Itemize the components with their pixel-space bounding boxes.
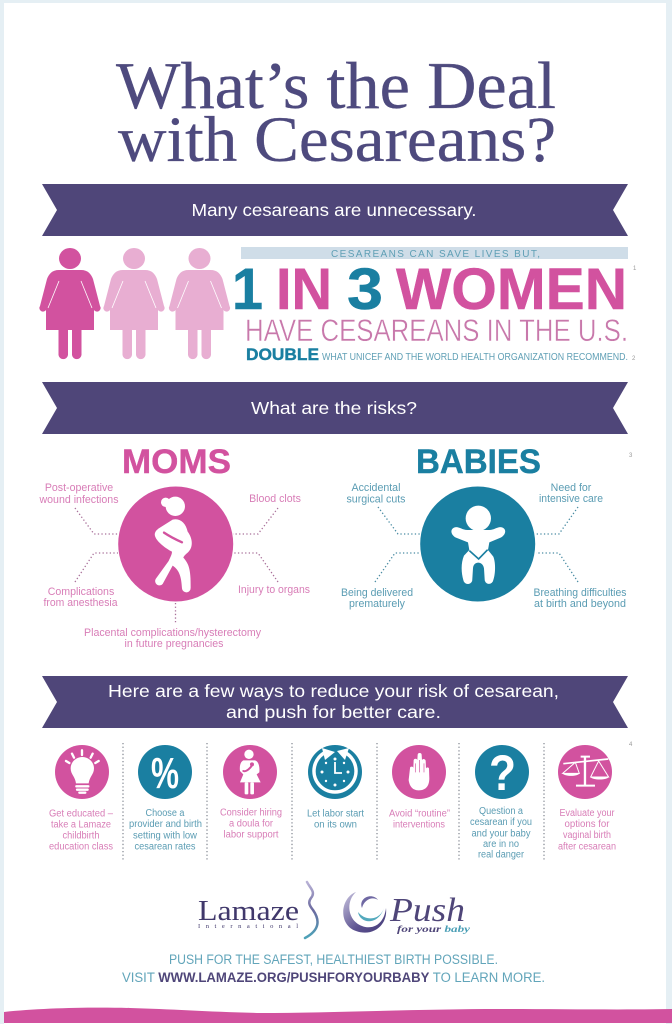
labels: moms bbox=[38, 482, 310, 650]
text: take a Lamaze bbox=[51, 820, 111, 830]
icon: question mark: ? bbox=[489, 745, 516, 801]
tip 5: avoid routine interventions bbox=[389, 745, 450, 830]
text bbox=[389, 808, 450, 830]
icon: hand bbox=[409, 753, 429, 790]
panel: babies risks: 3 bbox=[629, 453, 633, 459]
footer band bbox=[4, 1008, 672, 1023]
icon: doula bbox=[240, 750, 261, 794]
logo: Push for your baby: for your baby bbox=[397, 925, 471, 935]
labels: moms: from anesthesia bbox=[44, 597, 118, 609]
labels: moms: Injury to organs bbox=[238, 584, 310, 596]
statistic block: CESAREANS CAN SAVE LIVES BUT, bbox=[331, 249, 540, 260]
logo: Lamaze International: Lamaze bbox=[198, 895, 299, 927]
icon: clock with arrow bbox=[314, 748, 356, 792]
title: with Cesareans? bbox=[118, 104, 556, 176]
call to action bbox=[122, 952, 545, 985]
banner: risks bbox=[42, 382, 628, 434]
tip 4: let labor start bbox=[307, 745, 364, 830]
statistic block: 1 bbox=[232, 257, 263, 322]
text: Let labor start bbox=[307, 808, 364, 820]
panel: babies risks bbox=[341, 443, 633, 610]
statistic block: 2 bbox=[632, 356, 636, 362]
text: real danger bbox=[478, 850, 525, 860]
icon: baby bbox=[420, 486, 535, 602]
text: labor support bbox=[224, 830, 279, 840]
icon: light bulb bbox=[66, 750, 99, 793]
statistic block: 3 bbox=[347, 257, 383, 322]
logo: Lamaze International: International bbox=[198, 923, 298, 930]
text: Evaluate your bbox=[560, 808, 615, 819]
statistic block: WOMEN bbox=[396, 257, 627, 322]
panel: moms risks bbox=[38, 443, 310, 650]
icon: pregnant woman bbox=[118, 486, 233, 602]
text: setting with low bbox=[133, 830, 198, 842]
labels: babies: prematurely bbox=[349, 598, 406, 610]
tip 2: choose provider bbox=[129, 745, 202, 852]
statistic block: DOUBLE bbox=[246, 345, 319, 364]
statistic block: IN bbox=[276, 257, 332, 322]
text: after cesarean bbox=[558, 842, 616, 852]
text: Get educated – bbox=[49, 808, 114, 820]
text: options for bbox=[564, 819, 610, 830]
logo: Lamaze International bbox=[198, 882, 318, 938]
statistic block bbox=[232, 247, 637, 364]
text bbox=[220, 808, 282, 840]
labels: babies: Being delivered bbox=[341, 587, 413, 599]
text: on its own bbox=[314, 820, 357, 830]
text: and your baby bbox=[472, 828, 531, 840]
icon: scales bbox=[563, 757, 609, 786]
statistic block: WHAT UNICEF AND THE WORLD HEALTH ORGANIZATION RECOMMEND. bbox=[322, 352, 628, 363]
text: childbirth bbox=[62, 830, 100, 842]
text: Question a bbox=[479, 806, 524, 817]
icon: percent: % bbox=[151, 749, 179, 798]
text bbox=[49, 808, 114, 852]
labels: moms: in future pregnancies bbox=[125, 638, 223, 650]
banner: ways to reduce risk bbox=[42, 676, 628, 728]
icon: three women, one in three highlighted bbox=[39, 248, 230, 359]
tip 1: get educated bbox=[49, 745, 114, 852]
text: provider and birth bbox=[129, 819, 202, 830]
banner: ways to reduce risk: and push for better care. bbox=[226, 702, 441, 722]
logo: Push for your baby bbox=[343, 892, 471, 935]
connectors: babies bbox=[375, 507, 578, 582]
heading: babies: BABIES bbox=[416, 443, 541, 481]
labels: babies: Breathing difficulties bbox=[534, 587, 626, 599]
statistic block: 1 bbox=[633, 266, 637, 272]
labels: babies: Need for bbox=[551, 482, 592, 494]
text bbox=[307, 808, 364, 830]
title: What’s the Deal bbox=[116, 49, 556, 123]
text: are in no bbox=[483, 839, 519, 850]
labels: moms: Blood clots bbox=[249, 493, 301, 505]
tip 7: vaginal birth after cesarean: 4 bbox=[629, 742, 633, 748]
text: interventions bbox=[393, 820, 445, 830]
banner: risks: What are the risks? bbox=[251, 398, 417, 418]
connectors: moms bbox=[75, 508, 278, 623]
heading: moms: MOMS bbox=[122, 443, 231, 481]
text: Consider hiring bbox=[220, 808, 282, 818]
text: education class bbox=[49, 842, 113, 852]
tip 7: vaginal birth after cesarean bbox=[558, 742, 633, 852]
labels: moms: Complications bbox=[48, 586, 114, 598]
banner: many cesareans: Many cesareans are unnecessary. bbox=[192, 200, 476, 220]
text: vaginal birth bbox=[563, 830, 611, 841]
text: Avoid “routine” bbox=[389, 808, 450, 820]
labels: babies: intensive care bbox=[539, 493, 603, 505]
call to action: VISIT WWW.LAMAZE.ORG/PUSHFORYOURBABY TO LEARN MORE. bbox=[122, 970, 545, 985]
labels: babies: Accidental bbox=[352, 482, 400, 494]
labels: moms: Post-operative bbox=[45, 482, 113, 494]
text: a doula for bbox=[229, 818, 274, 830]
text: cesarean if you bbox=[470, 817, 532, 828]
tip 6: question a cesarean bbox=[470, 745, 532, 860]
text bbox=[129, 808, 202, 852]
labels: babies: at birth and beyond bbox=[534, 598, 626, 610]
tip 3: doula bbox=[220, 745, 282, 840]
banner: many cesareans bbox=[42, 184, 628, 236]
call to action: PUSH FOR THE SAFEST, HEALTHIEST BIRTH POSSIBLE. bbox=[169, 952, 498, 967]
text bbox=[470, 806, 532, 860]
text: cesarean rates bbox=[134, 842, 196, 852]
logo: Push for your baby: Push bbox=[389, 892, 465, 929]
text: Choose a bbox=[146, 808, 185, 819]
title bbox=[116, 49, 556, 176]
labels: babies bbox=[341, 482, 626, 610]
labels: moms: wound infections bbox=[38, 494, 118, 506]
labels: babies: surgical cuts bbox=[346, 494, 406, 506]
labels: moms: Placental complications/hysterectomy bbox=[84, 627, 262, 639]
text bbox=[558, 808, 616, 852]
banner: ways to reduce risk: Here are a few ways to reduce your risk of cesarean, bbox=[108, 681, 559, 701]
